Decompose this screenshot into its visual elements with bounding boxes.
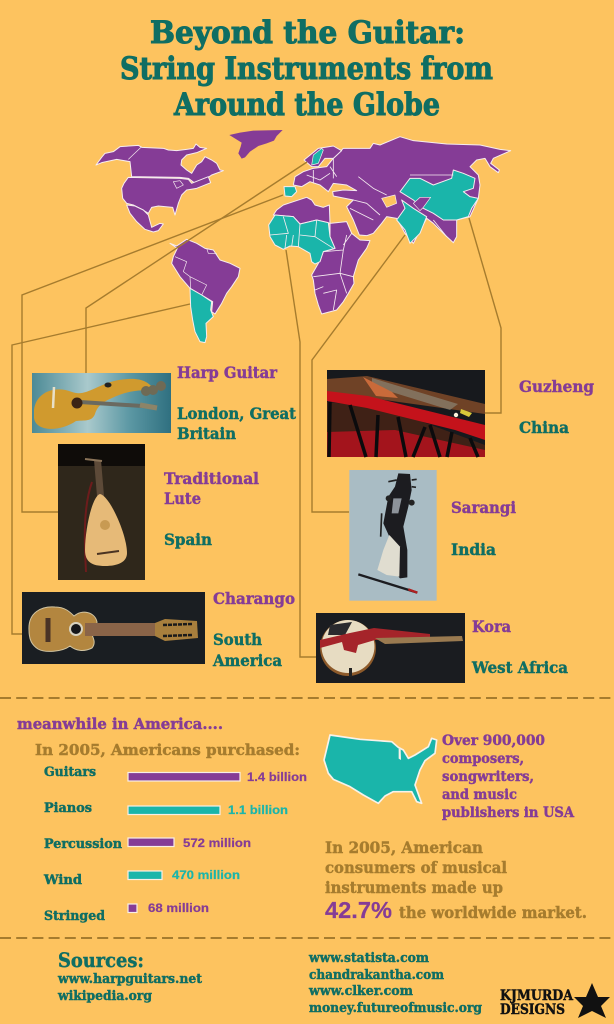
title: Around the Globe (173, 87, 440, 123)
title: Beyond the Guitar: (150, 15, 465, 51)
label: traditional lute: Lute (164, 489, 201, 508)
sources left: wikipedia.org (57, 989, 152, 1004)
text: market share stat: instruments made up (325, 878, 503, 897)
bar: stringed: Stringed (44, 909, 105, 924)
map: africa (269, 197, 370, 314)
bar: stringed: 68 million (148, 903, 209, 915)
map: eurasia (284, 137, 511, 243)
icon: usa map (324, 735, 437, 803)
label: harp guitar: Britain (177, 424, 236, 443)
bar: guitars: Guitars (44, 765, 96, 780)
label: charango: South (213, 630, 262, 649)
bar: guitars (44, 765, 307, 784)
label: charango (212, 589, 295, 670)
text: songwriters stat (442, 733, 575, 821)
label: harp guitar (177, 363, 297, 443)
bar: wind (43, 870, 240, 888)
text: songwriters stat: Over 900,000 (442, 733, 545, 749)
world map (96, 130, 511, 343)
line: west africa to kora (286, 250, 316, 657)
map: south america (170, 239, 240, 343)
sources right: money.futureofmusic.org (309, 1001, 482, 1016)
sources left: www.harpguitars.net (57, 972, 202, 987)
bar: wind: Wind (43, 873, 82, 888)
label: harp guitar: Harp Guitar (177, 363, 278, 382)
label: charango: America (212, 651, 282, 670)
bar: pianos: Pianos (44, 801, 92, 816)
title (120, 15, 493, 123)
label: sarangi: Sarangi (451, 498, 516, 517)
logo: kjmurda designs: DESIGNS (500, 1002, 565, 1018)
text: songwriters stat: songwriters, (442, 769, 534, 785)
bar chart: purchases (43, 765, 307, 924)
photo: guzheng (327, 370, 485, 457)
bar: pianos: 1.1 billion (228, 805, 288, 817)
label: guzheng: China (519, 418, 569, 437)
sources right (308, 951, 482, 1016)
photo: charango (22, 592, 205, 664)
text: songwriters stat: composers, (442, 751, 524, 767)
logo: kjmurda designs (500, 983, 610, 1018)
text: market share stat (325, 838, 587, 923)
line: argentina to charango (12, 304, 190, 634)
heading: purchases: In 2005, Americans purchased: (35, 741, 300, 759)
logo: kjmurda designs: KJMURDA (500, 988, 573, 1004)
label: sarangi (451, 498, 516, 559)
map: greenland (229, 130, 283, 159)
bar: percussion: 572 million (183, 838, 251, 850)
label: kora (471, 617, 568, 677)
heading: meanwhile in america: meanwhile in America.... (17, 715, 223, 733)
text: market share stat: 42.7% (325, 897, 392, 923)
label: harp guitar: London, Great (177, 404, 297, 423)
icon: star (574, 983, 610, 1018)
title: String Instruments from (120, 51, 493, 87)
photo: sarangi (349, 470, 437, 601)
sources right: chandrakantha.com (309, 968, 444, 983)
line: spain to lute (22, 195, 283, 512)
bar: wind: 470 million (172, 870, 240, 882)
photo: harp guitar (32, 373, 171, 433)
label: kora: Kora (472, 617, 511, 636)
connector lines (12, 162, 501, 657)
sources left (57, 948, 202, 1004)
bar: percussion (44, 837, 251, 852)
bar: guitars: 1.4 billion (247, 772, 307, 784)
text: songwriters stat: and music (442, 787, 517, 803)
photo: lute (58, 444, 145, 580)
sources right: www.statista.com (308, 951, 429, 966)
label: kora: West Africa (471, 658, 568, 677)
text: market share stat: the worldwide market. (399, 903, 587, 922)
text: songwriters stat: publishers in USA (442, 805, 575, 821)
photo: kora (316, 613, 465, 683)
label: traditional lute: Traditional (164, 469, 259, 488)
text: market share stat: In 2005, American (325, 838, 483, 857)
label: guzheng (519, 377, 594, 437)
sources right: www.clker.com (308, 984, 413, 999)
line: sweden to harp guitar (86, 162, 307, 373)
map: north america (96, 144, 223, 232)
bar: pianos (44, 801, 288, 817)
bar: percussion: Percussion (44, 837, 123, 852)
line: india to sarangi (312, 235, 405, 512)
sources left: Sources: (58, 948, 144, 972)
label: guzheng: Guzheng (519, 377, 594, 396)
bar: stringed (44, 903, 209, 924)
label: sarangi: India (451, 540, 496, 559)
line: china to guzheng (469, 218, 501, 413)
label: traditional lute: Spain (164, 530, 212, 549)
text: market share stat: consumers of musical (325, 858, 507, 877)
label: traditional lute (164, 469, 259, 549)
label: charango: Charango (213, 589, 295, 608)
